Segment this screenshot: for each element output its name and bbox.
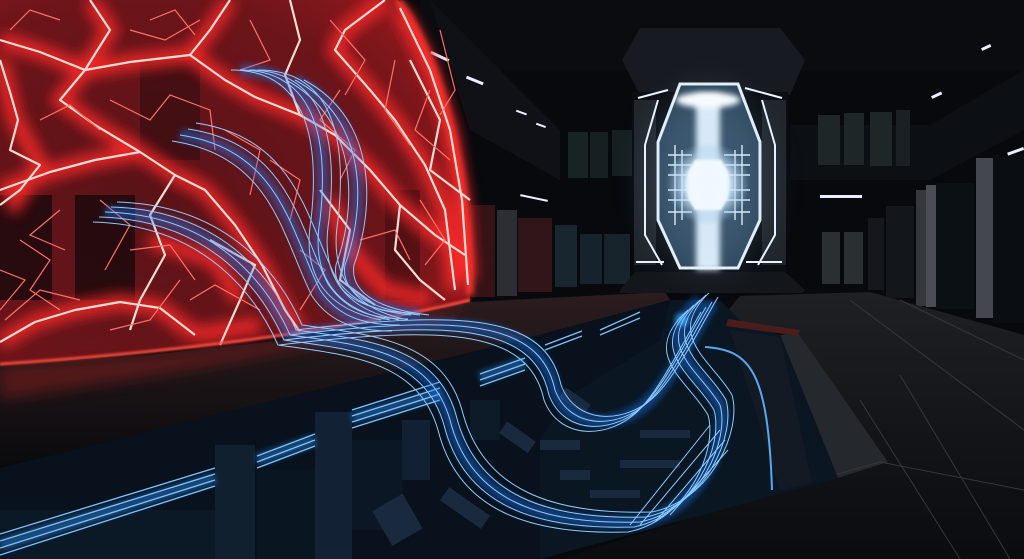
walkway strip xyxy=(780,333,888,478)
light column xyxy=(696,95,720,270)
glowing wall conduits glow xyxy=(0,362,525,545)
right floor xyxy=(560,292,1024,559)
ceiling lights xyxy=(430,44,1024,202)
cable glow xyxy=(105,70,722,522)
trench floor xyxy=(540,300,838,559)
core glow xyxy=(666,142,750,226)
machinery front wall xyxy=(0,300,670,559)
right trench conduit xyxy=(705,347,772,490)
red-edged ledge xyxy=(726,319,800,336)
glowing wall conduits xyxy=(0,312,640,555)
deck edge light xyxy=(0,300,470,364)
deck red reflection xyxy=(0,302,470,400)
far trench glow xyxy=(676,314,688,326)
circuit traces xyxy=(668,145,750,225)
reactor base xyxy=(620,272,805,293)
dome rim glow xyxy=(398,0,470,295)
right trench wall xyxy=(730,330,812,490)
core xyxy=(688,160,728,210)
reactor glow xyxy=(648,90,768,270)
trench blocks xyxy=(372,387,690,546)
back server racks xyxy=(470,110,1024,323)
machinery modules xyxy=(0,400,500,559)
blue data cables xyxy=(93,70,734,532)
lightning bolts xyxy=(0,0,470,345)
reactor chamber xyxy=(658,84,760,268)
red dome xyxy=(0,0,470,366)
deck platform xyxy=(0,292,670,468)
reactor side struts xyxy=(636,88,782,265)
lightning fine branches xyxy=(0,10,455,330)
dark server panels in dome xyxy=(0,60,420,300)
top light xyxy=(676,92,740,108)
reactor housing xyxy=(622,28,805,272)
lightning glow xyxy=(0,0,468,342)
floor seam lines xyxy=(660,300,1024,559)
